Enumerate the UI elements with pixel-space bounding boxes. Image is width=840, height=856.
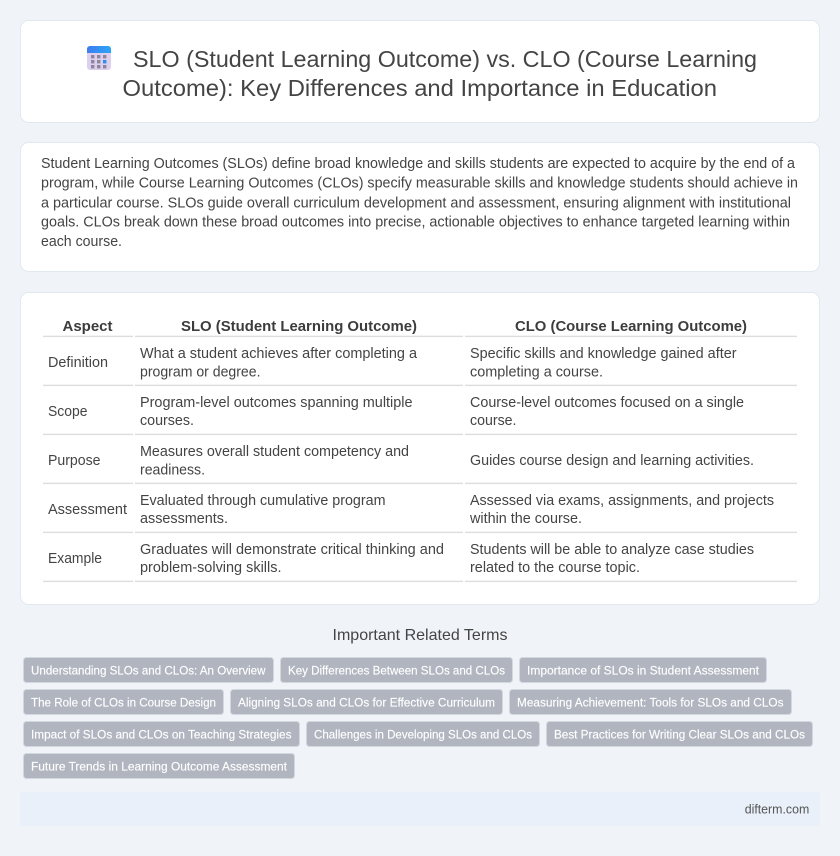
- tag: The Role of CLOs in Course Design: [31, 695, 216, 709]
- table header row: [62, 319, 747, 335]
- panel: comparison table: [20, 292, 820, 604]
- table row: example: related to the course topic.: [470, 560, 640, 576]
- tag: Key Differences Between SLOs and CLOs: [288, 663, 505, 677]
- text block: summary: a particular course. SLOs guide overall curriculum development and assessment, ensuring alignment with institutional: [41, 196, 791, 212]
- table row: purpose: Guides course design and learning activities.: [470, 453, 754, 469]
- title: [122, 46, 757, 101]
- table row: purpose: [48, 444, 754, 478]
- table row: definition: program or degree.: [140, 364, 260, 380]
- table row: definition: [48, 346, 737, 380]
- table row: scope: Program-level outcomes spanning multiple: [140, 395, 412, 411]
- table row: example: Graduates will demonstrate critical thinking and: [140, 542, 444, 558]
- tag: [24, 754, 294, 778]
- table row: example: Students will be able to analyze case studies: [470, 542, 754, 558]
- table header row: Aspect: [62, 319, 113, 335]
- table row: definition: Specific skills and knowledge gained after: [470, 346, 737, 362]
- table row: definition: What a student achieves after completing a: [140, 346, 417, 362]
- table row: assessment: [48, 493, 774, 527]
- text block: summary: [41, 156, 798, 250]
- text block: summary: program, while Course Learning Outcomes (CLOs) specify measurable skills and knowledge students should achieve in: [41, 176, 798, 192]
- panel: title header: [20, 20, 820, 122]
- tag list: related terms: [24, 658, 812, 778]
- tag: Impact of SLOs and CLOs on Teaching Strategies: [31, 727, 292, 741]
- tag: [24, 658, 274, 682]
- panel: summary paragraph: [20, 142, 820, 272]
- table row: scope: courses.: [140, 413, 194, 429]
- tag: Best Practices for Writing Clear SLOs and CLOs: [554, 727, 805, 741]
- table row: example: Example: [48, 551, 102, 567]
- table row: example: [48, 542, 754, 576]
- table row: assessment: assessments.: [140, 511, 228, 527]
- table row: purpose: Measures overall student competency and: [140, 444, 409, 460]
- table row: scope: course.: [470, 413, 516, 429]
- text block: summary: each course.: [41, 234, 122, 250]
- title: SLO (Student Learning Outcome) vs. CLO (Course Learning: [133, 46, 757, 72]
- table row: scope: Course-level outcomes focused on a single: [470, 395, 744, 411]
- tag: Measuring Achievement: Tools for SLOs and CLOs: [517, 695, 784, 709]
- tag: Understanding SLOs and CLOs: An Overview: [31, 663, 266, 677]
- text block: summary: goals. CLOs break down these broad outcomes into precise, actionable objectives to enhance targeted learning within: [41, 214, 790, 230]
- table row: assessment: Assessment: [48, 502, 127, 518]
- table row: purpose: Purpose: [48, 453, 100, 469]
- tag: Future Trends in Learning Outcome Assessment: [31, 759, 288, 773]
- heading: related terms: Important Related Terms: [332, 627, 508, 644]
- tag: Importance of SLOs in Student Assessment: [527, 663, 760, 677]
- title: Outcome): Key Differences and Importance in Education: [122, 75, 717, 101]
- table row: purpose: readiness.: [140, 462, 205, 478]
- table row: assessment: within the course.: [469, 511, 582, 527]
- table header row: SLO (Student Learning Outcome): [181, 319, 417, 335]
- tag: [510, 690, 792, 714]
- tag: [306, 722, 540, 746]
- tag: Aligning SLOs and CLOs for Effective Curriculum: [238, 695, 495, 709]
- footer: [20, 792, 820, 826]
- table row: scope: [48, 395, 744, 429]
- icon: calendar: [87, 46, 111, 70]
- table header row: CLO (Course Learning Outcome): [515, 319, 747, 335]
- tag: [230, 690, 502, 714]
- table row: example: problem-solving skills.: [140, 560, 282, 576]
- table row: scope: Scope: [48, 404, 88, 420]
- table row: assessment: Evaluated through cumulative program: [140, 493, 386, 509]
- table row: definition: Definition: [48, 355, 108, 371]
- table row: assessment: Assessed via exams, assignments, and projects: [470, 493, 774, 509]
- tag: [546, 722, 812, 746]
- footer: difterm.com: [745, 802, 809, 816]
- table row: definition: completing a course.: [470, 364, 603, 380]
- tag: Challenges in Developing SLOs and CLOs: [314, 727, 532, 741]
- text block: summary: Student Learning Outcomes (SLOs) define broad knowledge and skills students are expected to acquire by the end of a: [41, 156, 795, 172]
- tag: [520, 658, 766, 682]
- tag: [24, 722, 300, 746]
- tag: [24, 690, 224, 714]
- tag: [280, 658, 512, 682]
